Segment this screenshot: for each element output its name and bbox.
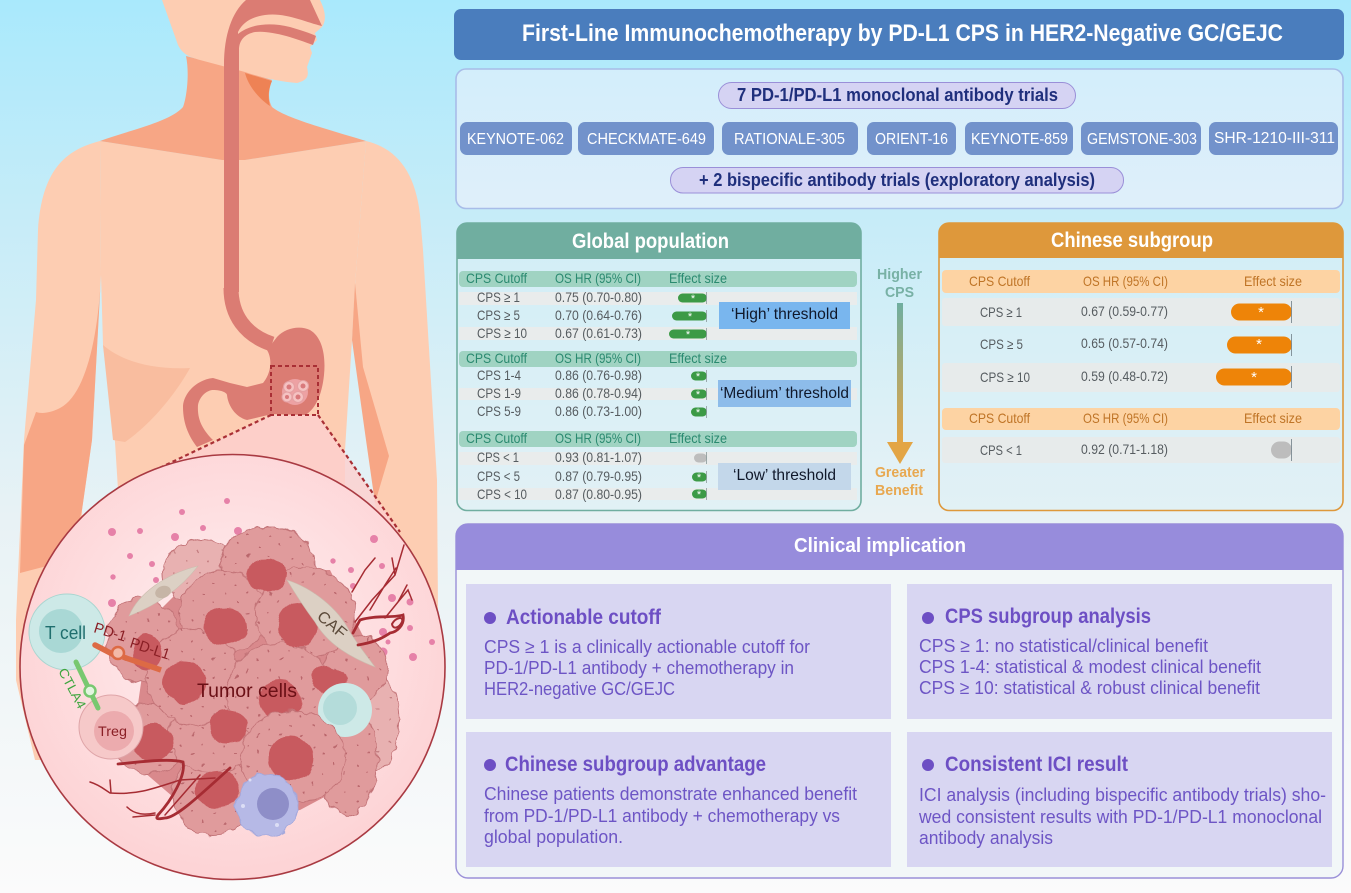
medium threshold table: CPS 5-9 xyxy=(477,403,521,419)
low threshold table: CPS < 1 xyxy=(477,449,519,465)
low threshold table: Effect size xyxy=(669,430,727,446)
secreted factors dots xyxy=(108,498,435,661)
high threshold label: ‘High’ threshold xyxy=(731,306,838,323)
card: CPS subgroup analysis: CPS ≥ 1: no statistical/clinical benefit xyxy=(919,635,1208,656)
trial name chips: GEMSTONE-303 xyxy=(1087,131,1197,148)
positive CPS table: CPS ≥ 5 xyxy=(980,336,1023,352)
positive CPS table xyxy=(942,270,1340,392)
positive CPS table: CPS Cutoff xyxy=(969,273,1030,289)
global population heading xyxy=(456,223,862,259)
positive CPS table: 0.67 (0.59-0.77) xyxy=(1081,303,1168,319)
negative CPS table: Effect size xyxy=(1244,410,1302,426)
trial name chips: CHECKMATE-649 xyxy=(587,131,706,148)
positive CPS table: Effect size xyxy=(1244,273,1302,289)
trial name chips xyxy=(460,122,1338,155)
medium threshold table: CPS 1-4 xyxy=(477,367,521,383)
immune cell behind tumor xyxy=(318,683,372,737)
high threshold table: * xyxy=(686,329,691,341)
medium threshold table: 0.86 (0.73-1.00) xyxy=(555,403,642,419)
medium threshold table: 0.86 (0.78-0.94) xyxy=(555,385,642,401)
high threshold table: CPS ≥ 10 xyxy=(477,325,527,341)
trial name chips: KEYNOTE-062 xyxy=(467,131,564,148)
icon: tumor in stomach xyxy=(282,379,308,405)
medium threshold label: ‘Medium’ threshold xyxy=(720,385,849,402)
positive CPS table: CPS ≥ 1 xyxy=(980,304,1022,320)
title xyxy=(454,9,1344,60)
medium threshold table: * xyxy=(696,371,701,383)
card: CPS subgroup analysis xyxy=(907,584,1332,719)
card: Chinese subgroup advantage: global population. xyxy=(484,826,623,847)
positive CPS table: * xyxy=(1258,304,1264,321)
positive CPS table: * xyxy=(1256,336,1262,353)
positive CPS table: * xyxy=(1251,369,1257,386)
arrow: higher CPS to greater benefit: Greater xyxy=(875,464,925,481)
clinical implication heading: Clinical implication xyxy=(794,535,966,557)
low threshold table: CPS < 10 xyxy=(477,486,527,502)
card: actionable cutoff: HER2-negative GC/GEJC xyxy=(484,678,675,699)
medium threshold table: Effect size xyxy=(669,350,727,366)
T cell: T cell xyxy=(45,623,86,643)
medium threshold table: CPS Cutoff xyxy=(466,350,527,366)
trial name chips: KEYNOTE-859 xyxy=(971,131,1068,148)
high threshold table: OS HR (95% CI) xyxy=(555,270,641,286)
card: CPS subgroup analysis: CPS 1-4: statistical & modest clinical benefit xyxy=(919,656,1261,677)
Chinese subgroup heading xyxy=(938,223,1344,258)
low threshold table: 0.87 (0.79-0.95) xyxy=(555,468,642,484)
CAF cell: CAF xyxy=(313,608,350,642)
PD-1 PD-L1 interaction: PD-L1 xyxy=(128,635,172,663)
trial name chips: RATIONALE-305 xyxy=(734,131,845,148)
trial name chips: SHR-1210-III-311 xyxy=(1214,130,1335,147)
high threshold table: 0.67 (0.61-0.73) xyxy=(555,325,642,341)
low threshold table: * xyxy=(697,489,702,501)
high threshold table: 0.70 (0.64-0.76) xyxy=(555,307,642,323)
Treg cell: Treg xyxy=(98,723,127,739)
monoclonal antibody trials pill: 7 PD-1/PD-L1 monoclonal antibody trials xyxy=(737,84,1058,105)
trial name chips: ORIENT-16 xyxy=(875,131,948,148)
card: actionable cutoff: CPS ≥ 1 is a clinically actionable cutoff for xyxy=(484,636,810,657)
bispecific antibody trials pill: + 2 bispecific antibody trials (exploratory analysis) xyxy=(699,169,1095,190)
blood vessels lower left xyxy=(90,760,230,819)
blood vessels upper right xyxy=(352,545,412,645)
negative CPS table: OS HR (95% CI) xyxy=(1083,410,1168,426)
CTLA4 interaction: CTLA4 xyxy=(55,665,89,711)
tumor cells label: Tumor cells xyxy=(197,680,297,702)
medium threshold label xyxy=(718,380,851,407)
macrophage cell xyxy=(236,774,298,836)
card: CPS subgroup analysis: CPS ≥ 10: statistical & robust clinical benefit xyxy=(919,677,1260,698)
low threshold label xyxy=(718,463,851,490)
card: actionable cutoff xyxy=(466,584,891,719)
panel: trials xyxy=(456,69,1343,208)
card: consistent ICI result: wed consistent results with PD-1/PD-L1 monoclonal xyxy=(918,806,1322,827)
global population heading: Global population xyxy=(572,230,729,253)
low threshold table: CPS Cutoff xyxy=(466,430,527,446)
card: CPS subgroup analysis: CPS subgroup analysis xyxy=(945,605,1151,628)
negative CPS table: CPS < 1 xyxy=(980,442,1022,458)
illustration: tumor microenvironment circle xyxy=(20,454,445,880)
high threshold table: Effect size xyxy=(669,270,727,286)
T cell xyxy=(29,594,105,670)
high threshold table: * xyxy=(688,311,693,323)
fibroblast cell xyxy=(129,566,198,616)
low threshold table: CPS < 5 xyxy=(477,468,520,484)
arrow: higher CPS to greater benefit: Higher xyxy=(877,266,922,283)
arrow: higher CPS to greater benefit: CPS xyxy=(885,284,914,301)
medium threshold table: 0.86 (0.76-0.98) xyxy=(555,367,642,383)
tumor cell mass xyxy=(107,527,399,835)
card: consistent ICI result xyxy=(907,732,1332,867)
arrow: higher CPS to greater benefit: Benefit xyxy=(875,482,923,499)
positive CPS table: 0.65 (0.57-0.74) xyxy=(1081,335,1168,351)
high threshold table: * xyxy=(691,293,696,305)
positive CPS table: 0.59 (0.48-0.72) xyxy=(1081,368,1168,384)
clinical implication heading xyxy=(456,524,1344,570)
positive CPS table: CPS ≥ 10 xyxy=(980,369,1030,385)
arrow: higher CPS to greater benefit xyxy=(875,266,925,499)
PD-1 PD-L1 interaction xyxy=(92,620,172,670)
low threshold table: OS HR (95% CI) xyxy=(555,430,641,446)
PD-1 PD-L1 interaction: PD-1 xyxy=(92,620,128,645)
negative CPS table: 0.92 (0.71-1.18) xyxy=(1081,441,1168,457)
zoom cone with dashed connector xyxy=(130,366,400,532)
card: actionable cutoff: Actionable cutoff xyxy=(506,606,662,629)
negative CPS table xyxy=(942,408,1340,463)
high threshold table: CPS Cutoff xyxy=(466,270,527,286)
medium threshold table: * xyxy=(696,389,701,401)
card: Chinese subgroup advantage: Chinese patients demonstrate enhanced benefit xyxy=(484,783,857,804)
medium threshold table: OS HR (95% CI) xyxy=(555,350,641,366)
low threshold table: 0.93 (0.81-1.07) xyxy=(555,449,642,465)
card: Chinese subgroup advantage: from PD-1/PD-L1 antibody + chemotherapy vs xyxy=(484,805,840,826)
high threshold table: CPS ≥ 5 xyxy=(477,307,520,323)
high threshold label xyxy=(719,302,850,329)
illustration: human body with digestive tract xyxy=(16,0,438,760)
low threshold table: 0.87 (0.80-0.95) xyxy=(555,486,642,502)
card: consistent ICI result: ICI analysis (including bispecific antibody trials) sho- xyxy=(919,784,1326,805)
high threshold table: CPS ≥ 1 xyxy=(477,289,520,305)
Chinese subgroup heading: Chinese subgroup xyxy=(1051,229,1213,252)
positive CPS table: OS HR (95% CI) xyxy=(1083,273,1168,289)
panel: Chinese subgroup xyxy=(938,223,1344,510)
CAF cell xyxy=(287,580,375,667)
Treg cell xyxy=(79,695,143,759)
panel: global population xyxy=(456,223,862,510)
high threshold table xyxy=(459,270,857,341)
negative CPS table: CPS Cutoff xyxy=(969,410,1030,426)
card: actionable cutoff: PD-1/PD-L1 antibody + chemotherapy in xyxy=(484,657,794,678)
card: Chinese subgroup advantage: Chinese subgroup advantage xyxy=(505,753,766,776)
low threshold table xyxy=(459,430,857,502)
card: Chinese subgroup advantage xyxy=(466,732,891,867)
front tumor cell xyxy=(241,711,345,803)
card: consistent ICI result: antibody analysis xyxy=(919,827,1053,848)
CTLA4 interaction xyxy=(55,662,98,711)
panel: clinical implication xyxy=(456,524,1344,878)
low threshold label: ‘Low’ threshold xyxy=(733,467,836,484)
medium threshold table xyxy=(459,350,857,419)
low threshold table: * xyxy=(697,472,702,484)
medium threshold table: CPS 1-9 xyxy=(477,385,521,401)
medium threshold table: * xyxy=(696,407,701,419)
high threshold table: 0.75 (0.70-0.80) xyxy=(555,289,642,305)
card: consistent ICI result: Consistent ICI result xyxy=(945,753,1128,776)
